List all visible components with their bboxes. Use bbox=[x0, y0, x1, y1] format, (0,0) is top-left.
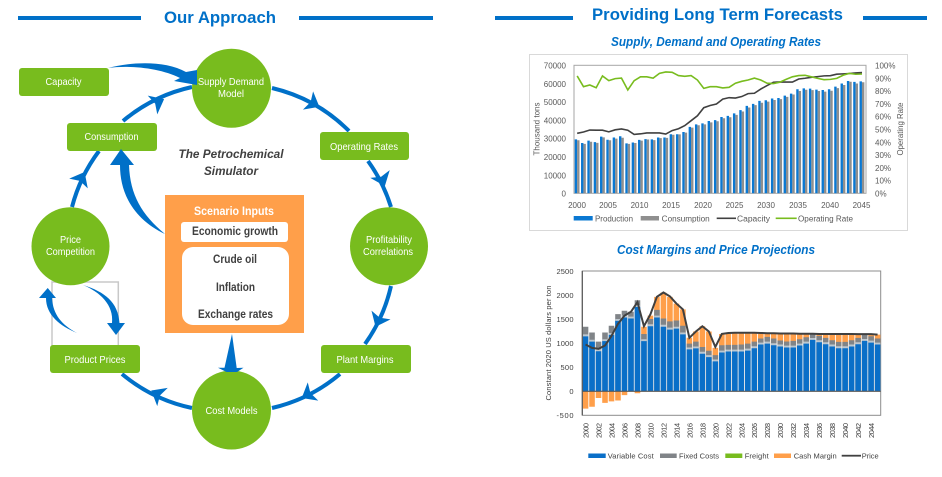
x axis labels: 2045 bbox=[853, 201, 871, 210]
legend: chart one: Consumption bbox=[662, 214, 710, 224]
x axis labels: 2008 bbox=[633, 423, 642, 438]
x axis labels: 2030 bbox=[757, 201, 775, 210]
x axis labels: 2000 bbox=[568, 201, 586, 210]
box: capacity bbox=[19, 68, 109, 96]
y axis labels: -500 bbox=[556, 411, 574, 420]
icon: cycle arrowheads bbox=[69, 90, 395, 407]
cycle ring arcs bbox=[72, 87, 391, 408]
right axis labels: 90% bbox=[875, 74, 891, 83]
node: profitability correlations bbox=[350, 207, 428, 285]
x axis labels: 2042 bbox=[854, 423, 863, 438]
box: plant margins bbox=[321, 345, 411, 373]
panel: scenario inputs: Economic growth bbox=[192, 224, 278, 238]
legend: chart one bbox=[574, 214, 854, 224]
subtitle: supply demand and operating rates: Supply, Demand and Operating Rates bbox=[611, 35, 821, 49]
legend: chart one: Capacity bbox=[737, 214, 770, 224]
arrow: capacity to supply demand model bbox=[108, 63, 197, 85]
box: operating rates: Operating Rates bbox=[330, 141, 398, 153]
left axis labels: Thousand tons bbox=[532, 102, 542, 156]
right axis labels: 80% bbox=[875, 87, 891, 96]
chart: supply demand and operating rates bbox=[530, 54, 908, 230]
x axis labels: 2030 bbox=[776, 423, 785, 438]
x axis labels bbox=[568, 201, 871, 210]
x axis labels: 2002 bbox=[594, 423, 604, 438]
x axis labels: 2040 bbox=[841, 423, 850, 438]
right axis labels: 30% bbox=[875, 151, 891, 160]
label: the petrochemical simulator bbox=[178, 147, 284, 178]
operating rate line bbox=[577, 72, 862, 90]
box: capacity: Capacity bbox=[46, 76, 82, 88]
x axis labels: 2015 bbox=[662, 201, 680, 210]
y axis labels: 1500 bbox=[556, 315, 574, 324]
y axis labels bbox=[544, 267, 574, 420]
right axis labels: 50% bbox=[875, 126, 891, 134]
left axis labels: 30000 bbox=[544, 135, 567, 144]
x axis labels: 2020 bbox=[694, 201, 712, 210]
legend: chart two: Price bbox=[862, 452, 879, 461]
left axis labels: 40000 bbox=[544, 116, 567, 125]
right axis labels: 20% bbox=[875, 164, 891, 173]
x axis labels: 2026 bbox=[750, 423, 759, 438]
label: the petrochemical simulator: The Petrochemical bbox=[178, 147, 284, 161]
x axis labels: 2010 bbox=[631, 201, 649, 210]
arrow: product prices to price competition bbox=[39, 288, 77, 333]
box: product prices bbox=[50, 345, 140, 373]
arrow: scenario inputs to consumption bbox=[110, 149, 165, 234]
right axis labels: Operating Rate bbox=[896, 102, 905, 156]
x axis labels: 2000 bbox=[582, 423, 590, 438]
legend: chart two: Cash Margin bbox=[794, 452, 837, 461]
panel: providing long term forecasts bbox=[495, 5, 927, 461]
y axis labels: Constant 2020 US dollars per ton bbox=[544, 286, 553, 400]
x axis labels: 2032 bbox=[789, 423, 798, 438]
heading: providing long term forecasts bbox=[495, 5, 927, 24]
y axis labels: 2000 bbox=[556, 291, 574, 300]
x axis labels: 2004 bbox=[608, 423, 616, 438]
left axis labels: 20000 bbox=[544, 153, 567, 162]
x axis labels: 2035 bbox=[789, 201, 807, 210]
panel: scenario inputs: Exchange rates bbox=[198, 307, 273, 321]
node: profitability correlations: Correlations bbox=[363, 246, 413, 258]
node: price competition: Competition bbox=[46, 246, 95, 258]
left axis labels: 50000 bbox=[544, 98, 567, 107]
legend: chart one: Operating Rate bbox=[798, 214, 854, 224]
right axis labels: 0% bbox=[875, 190, 887, 198]
x axis labels: 2025 bbox=[726, 201, 744, 210]
node: supply demand model: Model bbox=[218, 88, 244, 100]
node: supply demand model bbox=[192, 49, 271, 128]
x axis labels: 2036 bbox=[815, 423, 824, 438]
capacity line bbox=[577, 73, 862, 134]
panel: scenario inputs: Crude oil bbox=[213, 252, 257, 266]
production and consumption bars bbox=[576, 81, 863, 193]
box: consumption: Consumption bbox=[84, 131, 139, 143]
x axis labels: 2014 bbox=[672, 423, 681, 438]
node: cost models bbox=[192, 370, 271, 450]
chart: cost margins and price projections bbox=[544, 267, 881, 461]
x axis labels bbox=[582, 423, 876, 438]
node: price competition: Price bbox=[60, 234, 81, 246]
legend: chart two: Fixed Costs bbox=[679, 452, 719, 461]
x axis labels: 2012 bbox=[659, 423, 668, 438]
left axis labels: 70000 bbox=[544, 62, 567, 70]
node: cost models: Cost Models bbox=[206, 405, 258, 417]
right axis labels: 10% bbox=[875, 177, 891, 186]
x axis labels: 2034 bbox=[802, 423, 811, 438]
heading: our approach bbox=[18, 8, 433, 27]
left axis labels: 10000 bbox=[544, 171, 567, 180]
x axis labels: 2016 bbox=[685, 423, 694, 438]
y axis labels: 1000 bbox=[556, 339, 574, 348]
legend: chart two: Freight bbox=[745, 452, 770, 461]
y axis labels: 2500 bbox=[556, 267, 574, 276]
legend: chart one: Production bbox=[595, 214, 633, 224]
panel: scenario inputs bbox=[165, 195, 304, 333]
left axis labels: 60000 bbox=[544, 80, 567, 89]
legend: chart two: Variable Cost bbox=[608, 452, 655, 461]
x axis labels: 2038 bbox=[828, 423, 837, 438]
x axis labels: 2040 bbox=[821, 201, 839, 210]
right axis labels: 60% bbox=[875, 113, 891, 122]
x axis labels: 2005 bbox=[599, 201, 617, 210]
axis lines bbox=[582, 271, 881, 415]
x axis labels: 2022 bbox=[724, 423, 733, 438]
legend: chart two bbox=[588, 452, 879, 461]
left axis labels: 0 bbox=[562, 190, 567, 198]
node: price competition bbox=[32, 207, 110, 285]
node: profitability correlations: Profitability bbox=[366, 234, 413, 246]
label: the petrochemical simulator: Simulator bbox=[204, 164, 259, 178]
x axis labels: 2044 bbox=[867, 423, 876, 438]
x axis labels: 2018 bbox=[698, 423, 707, 438]
box: product prices: Product Prices bbox=[64, 354, 126, 366]
right axis labels: 100% bbox=[875, 62, 895, 70]
box: plant margins: Plant Margins bbox=[336, 354, 394, 366]
arrow: scenario inputs to cost models bbox=[218, 334, 244, 372]
panel: scenario inputs: Scenario Inputs bbox=[194, 204, 274, 218]
left axis labels bbox=[532, 62, 567, 198]
panel: our approach bbox=[18, 8, 433, 450]
price line bbox=[586, 292, 878, 349]
x axis labels: 2020 bbox=[711, 423, 720, 438]
subtitle: cost margins and price projections: Cost Margins and Price Projections bbox=[617, 243, 815, 257]
y axis labels: 500 bbox=[560, 363, 574, 372]
y axis labels: 0 bbox=[569, 387, 574, 396]
decorative bracket between price competition and product prices bbox=[52, 282, 118, 348]
arrow: price competition to product prices bbox=[83, 285, 125, 335]
box: operating rates bbox=[320, 132, 409, 160]
node: supply demand model: Supply Demand bbox=[198, 76, 264, 88]
right axis labels: 70% bbox=[875, 100, 891, 109]
right axis labels: 40% bbox=[875, 138, 891, 147]
heading: providing long term forecasts: Providing Long Term Forecasts bbox=[592, 5, 843, 24]
x axis labels: 2006 bbox=[620, 423, 629, 438]
box: consumption bbox=[67, 123, 157, 151]
panel: scenario inputs: Inflation bbox=[216, 280, 255, 294]
stacked bars bbox=[586, 292, 878, 409]
heading: our approach: Our Approach bbox=[164, 8, 276, 27]
x axis labels: 2024 bbox=[737, 423, 746, 438]
x axis labels: 2010 bbox=[646, 423, 655, 438]
x axis labels: 2028 bbox=[763, 423, 772, 438]
right axis labels bbox=[875, 62, 905, 198]
